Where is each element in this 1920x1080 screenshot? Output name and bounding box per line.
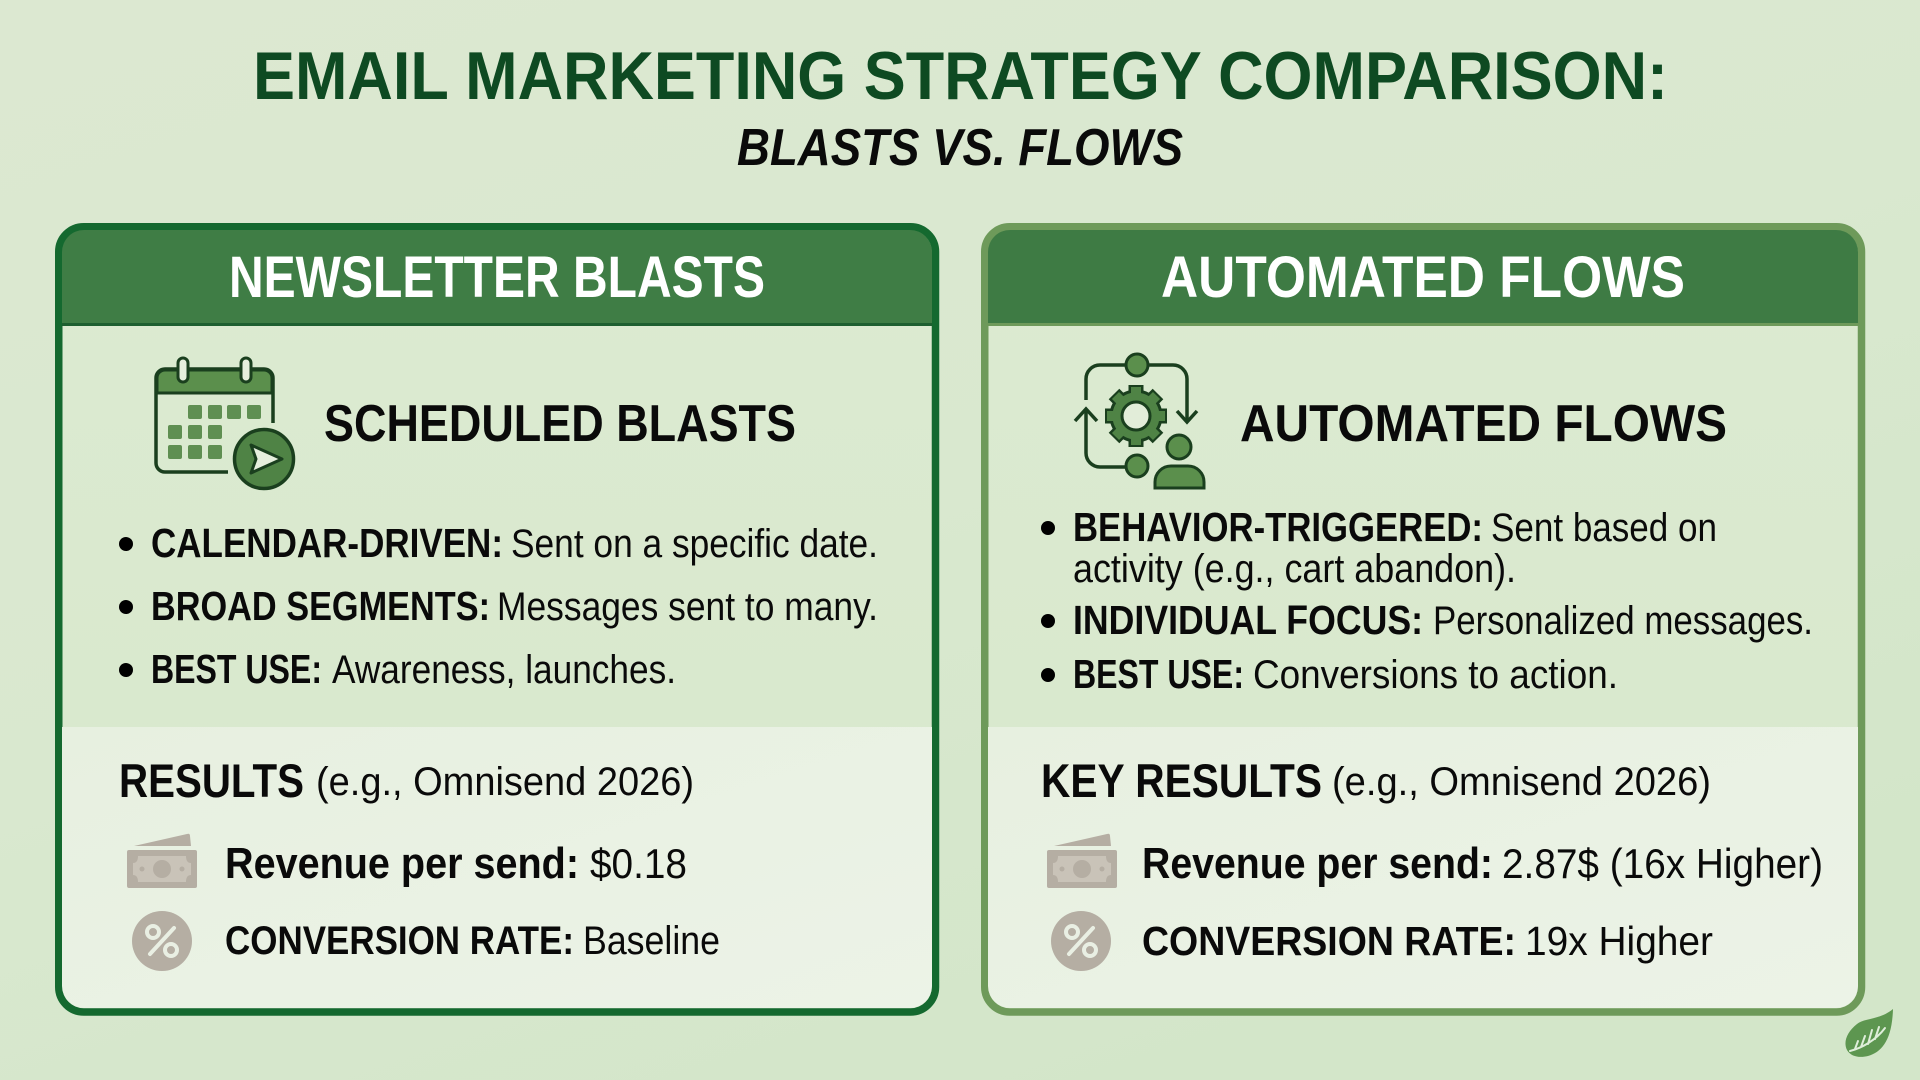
icon: gear, loop and person [1075, 354, 1204, 488]
icon: percent badge [1051, 911, 1111, 971]
panel heading: automated flows: AUTOMATED FLOWS [1161, 245, 1685, 310]
revenue per send: flows [1142, 839, 1823, 888]
bullet list: blasts: Sent on a specific date. [511, 522, 878, 566]
conversion rate: blasts: CONVERSION RATE: [225, 919, 574, 963]
bullet list: blasts: CALENDAR-DRIVEN: [151, 520, 503, 566]
bullet list: blasts: BROAD SEGMENTS: [151, 583, 490, 629]
panel heading: newsletter blasts: NEWSLETTER BLASTS [229, 245, 765, 310]
icon: percent badge [132, 911, 192, 971]
title [253, 38, 1668, 177]
revenue per send: flows: Revenue per send: [1142, 839, 1493, 888]
bullet list: blasts: Messages sent to many. [497, 585, 878, 629]
results heading: blasts: RESULTS [119, 754, 304, 807]
icon: calendar with send button [156, 358, 294, 488]
subheading: automated flows: AUTOMATED FLOWS [1240, 395, 1727, 453]
title: EMAIL MARKETING STRATEGY COMPARISON: [253, 38, 1668, 114]
panel: newsletter blasts [59, 227, 936, 1012]
bullet list: flows: Conversions to action. [1253, 653, 1618, 697]
bullet list: flows: INDIVIDUAL FOCUS: [1073, 597, 1423, 643]
bullet list: flows [1041, 504, 1813, 697]
bullet list: flows: activity (e.g., cart abandon). [1073, 547, 1516, 591]
conversion rate: flows: 19x Higher [1525, 918, 1713, 964]
bullet list: flows: BEHAVIOR-TRIGGERED: [1073, 504, 1483, 550]
bullet list: flows: Personalized messages. [1433, 599, 1813, 643]
icon: money [1047, 834, 1117, 888]
results heading: blasts: (e.g., Omnisend 2026) [316, 760, 694, 804]
bullet list: blasts: Awareness, launches. [332, 648, 676, 692]
conversion rate: blasts: Baseline [583, 919, 720, 963]
bullet list: flows: Sent based on [1491, 506, 1717, 550]
results heading: blasts [119, 754, 694, 807]
results heading: flows: KEY RESULTS [1041, 754, 1322, 807]
icon: money [127, 834, 197, 888]
results heading: flows [1041, 754, 1711, 807]
revenue per send: blasts: $0.18 [590, 840, 687, 887]
revenue per send: blasts: Revenue per send: [225, 839, 579, 888]
panel: automated flows [985, 227, 1862, 1012]
icon: leaf logo [1845, 1009, 1893, 1057]
results heading: flows: (e.g., Omnisend 2026) [1332, 760, 1711, 804]
bullet list: flows: BEST USE: [1073, 651, 1244, 697]
conversion rate: flows: CONVERSION RATE: [1142, 918, 1516, 964]
revenue per send: flows: 2.87$ (16x Higher) [1502, 840, 1823, 887]
subheading: scheduled blasts: SCHEDULED BLASTS [324, 395, 796, 453]
title: BLASTS VS. FLOWS [737, 119, 1183, 177]
bullet list: blasts: BEST USE: [151, 646, 322, 692]
bullet list: blasts [119, 520, 878, 692]
